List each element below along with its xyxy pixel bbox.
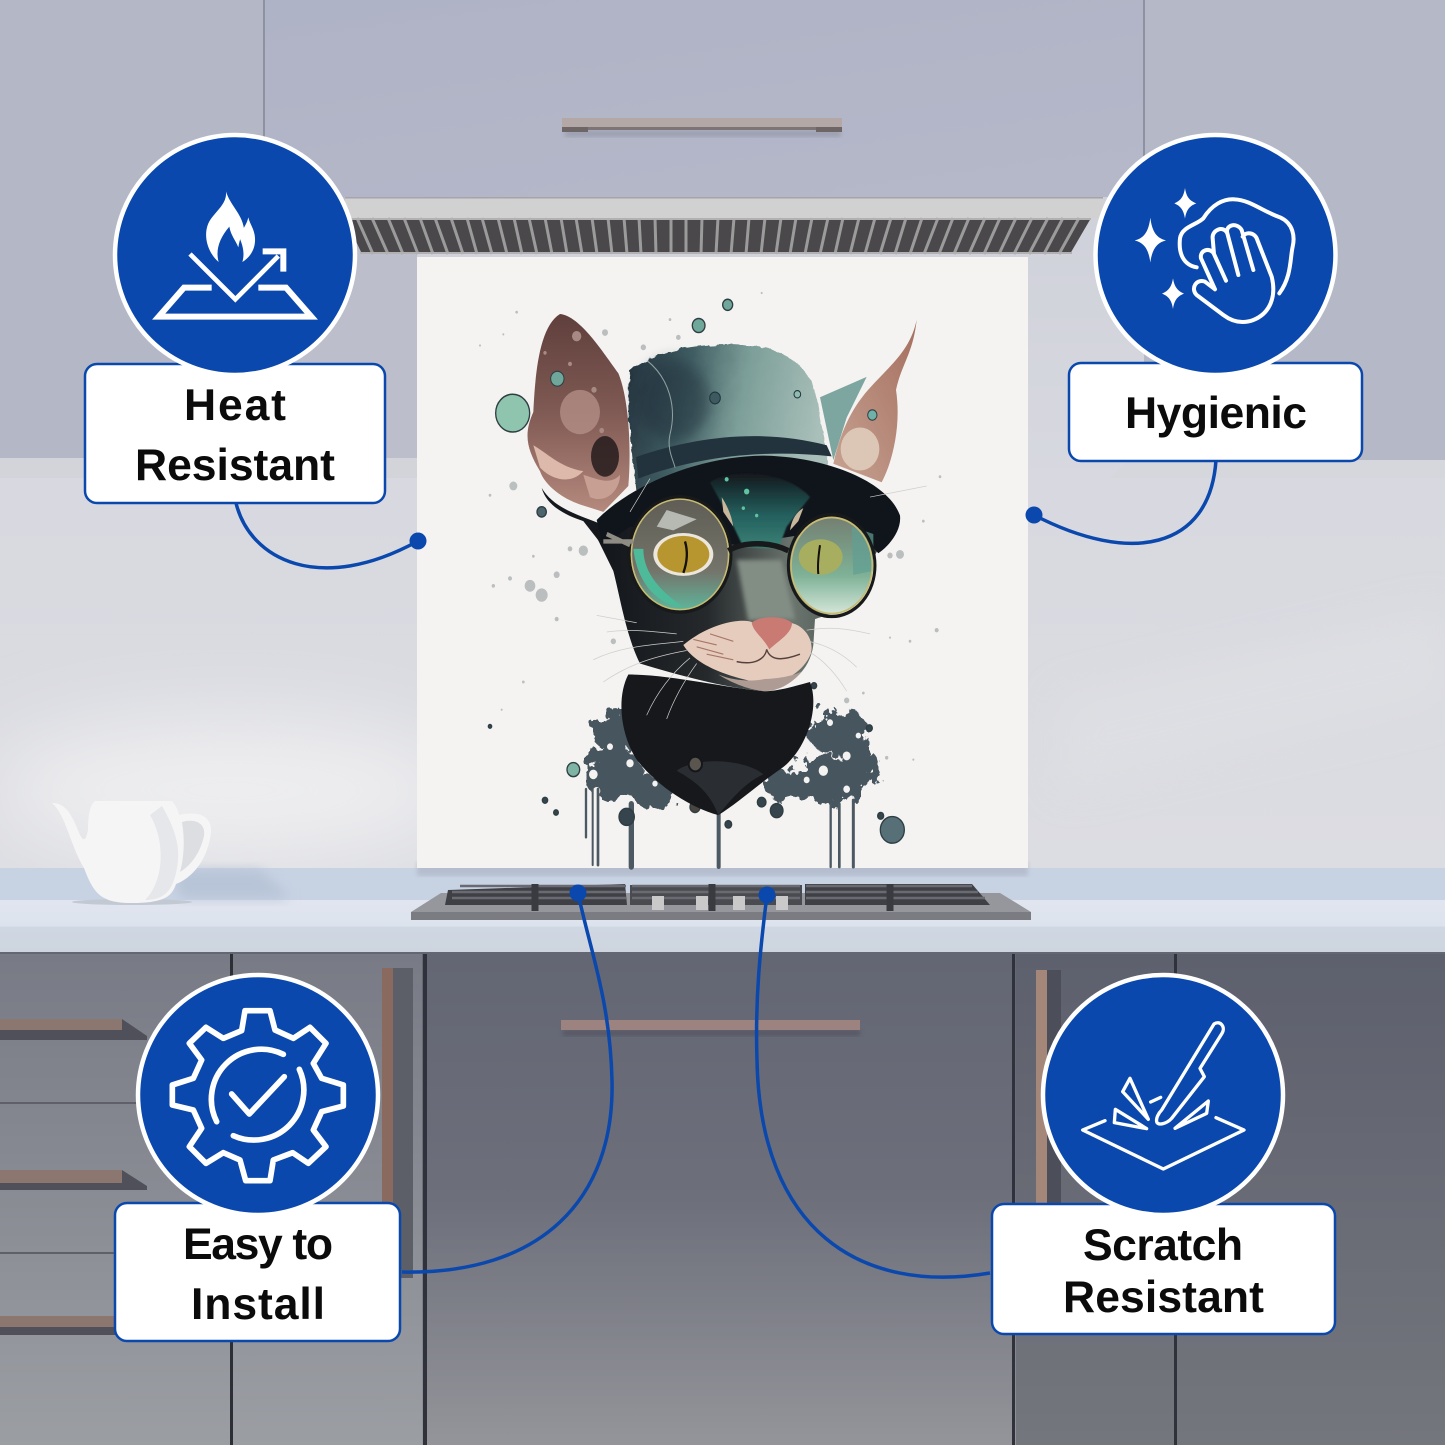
neck and jacket [621,675,813,815]
hat brim [597,456,900,553]
teapot [52,801,290,905]
callout: scratch resistant [992,975,1335,1334]
label text: Heat [184,381,286,430]
label text: Resistant [135,441,335,490]
label text [1063,1221,1264,1322]
jacket collar [677,761,763,815]
label text: Install [191,1280,325,1329]
badge circle [1096,135,1336,375]
cabinet under-shelf right [1110,460,1445,478]
label text: Hygienic [1125,389,1307,438]
label box [992,1204,1335,1334]
wall light glow [0,720,470,860]
label text: Easy to [183,1220,333,1269]
paint holes [589,719,861,795]
icon: flame on surface [159,191,311,317]
left lens [629,497,731,612]
paint drips [586,789,853,867]
right lens [788,514,875,617]
connector: scratch resistant [757,886,990,1277]
wall [0,195,1445,875]
upper handle [562,118,842,137]
left ear [528,314,630,549]
cabinet handles [0,968,1061,1335]
cabinet under-shelf left [0,458,417,478]
nose bridge [737,560,795,621]
hat crown [629,345,832,497]
badge circle [115,135,355,375]
cat artwork [479,292,941,867]
callout: hygienic [1069,135,1362,461]
nose [752,617,792,649]
label text: Resistant [1063,1273,1264,1322]
glasses bridge and hinge [603,534,788,551]
right ear [820,320,917,482]
paint splash right [763,710,880,806]
icon: hand wiping with sparkles [1135,188,1294,322]
head [593,490,878,691]
connector: easy to install [402,884,612,1272]
callout: easy to install [115,975,400,1341]
connector: hygienic [1026,460,1216,543]
label text: Scratch [1083,1221,1243,1270]
cooktop [411,884,1031,920]
label box [115,1203,400,1341]
icon: knife scratching surface [1083,1023,1244,1169]
label box [1069,363,1362,461]
paint splash left [583,708,677,804]
countertop [0,868,1445,952]
badge circle [1043,975,1283,1215]
badge circle [138,975,378,1215]
paint specks [479,292,941,761]
label box [85,364,385,503]
label text [135,381,335,490]
jacket button [689,757,702,771]
callout: heat resistant [85,135,385,503]
splashback panel [417,257,1028,868]
whiskers [593,479,927,719]
panel shadow [417,862,1028,876]
wall light band right [1060,610,1445,790]
forehead markings [710,474,810,549]
label text [183,1220,333,1329]
muzzle [683,621,812,691]
paint bubbles [488,299,904,843]
range hood [345,197,1103,254]
icon: gear with check [172,1011,343,1181]
base cabinets [0,952,1445,1445]
upper cabinets [0,0,1445,460]
connector: heat resistant [236,503,426,568]
